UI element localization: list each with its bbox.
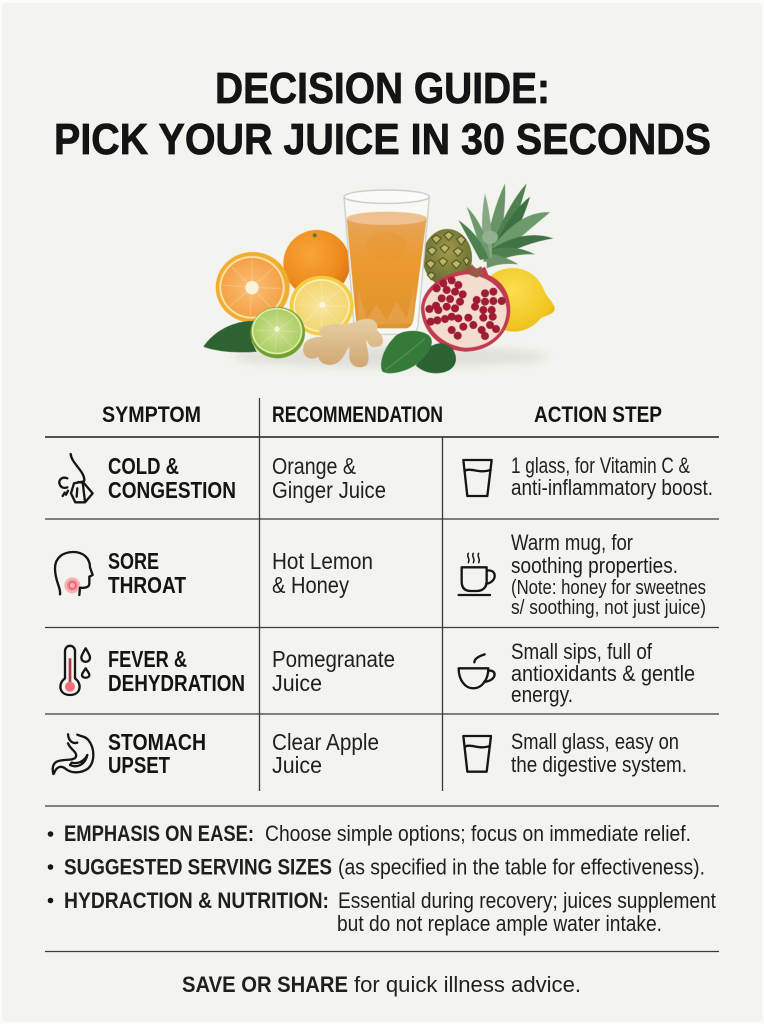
table header: ACTION STEP [534, 402, 662, 427]
icon: head with sore throat [55, 552, 93, 595]
recommendation: orange and ginger: Ginger Juice [272, 477, 386, 503]
icon: glass [463, 460, 492, 496]
halved orange [216, 252, 290, 323]
pomegranate seeds [425, 276, 506, 340]
pineapple body [423, 229, 472, 286]
symptom: cold and congestion: CONGESTION [108, 477, 236, 503]
recommendation: clear apple juice [272, 729, 379, 778]
spinach leaves [381, 331, 456, 373]
action: small sips: Small sips, full of [511, 639, 653, 664]
symptom: stomach upset: STOMACH [108, 729, 206, 755]
green leaf [203, 321, 257, 352]
footer call to action [182, 972, 581, 997]
pineapple crown [458, 183, 553, 268]
recommendation: clear apple juice: Clear Apple [272, 729, 379, 755]
action: small glass: the digestive system. [511, 752, 687, 777]
recommendation: orange and ginger [272, 453, 386, 503]
action: small sips: antioxidants & gentle [511, 661, 695, 686]
action: one glass: 1 glass, for Vitamin C & [511, 453, 690, 478]
symptom: fever and dehydration: DEHYDRATION [108, 670, 245, 696]
notes section [45, 806, 719, 952]
recommendation: hot lemon and honey [272, 548, 373, 598]
recommendation: orange and ginger: Orange & [272, 453, 356, 479]
recommendation: pomegranate juice: Pomegranate [272, 646, 395, 672]
recommendation: hot lemon and honey: Hot Lemon [272, 548, 373, 574]
pomegranate [421, 264, 510, 352]
action: one glass: anti-inflammatory boost. [511, 475, 713, 500]
icon: cup with steam [459, 654, 495, 688]
title: DECISION GUIDE: [215, 64, 550, 113]
lime [250, 307, 305, 358]
action: warm mug with note: s/ soothing, not just juice) [511, 597, 706, 619]
icon: nose with tissue [59, 454, 93, 502]
footer call to action: SAVE OR SHARE [182, 972, 348, 997]
icon: small glass [463, 736, 491, 772]
symptom: stomach upset [108, 729, 206, 778]
bullet: emphasis on ease: Choose simple options; focus on immediate relief. [265, 821, 691, 846]
footer call to action: for quick illness advice. [354, 972, 581, 997]
action: one glass [511, 453, 713, 500]
hero image: juice glass with fruits [203, 183, 555, 373]
bullet: suggested serving sizes [48, 854, 705, 880]
action: small glass [511, 729, 687, 777]
action: warm mug with note [511, 530, 706, 619]
action: warm mug with note: soothing properties. [511, 553, 678, 578]
recommendation: pomegranate juice [272, 646, 395, 696]
bullet: hydration and nutrition [48, 888, 717, 936]
bullet: suggested serving sizes: SUGGESTED SERVING SIZES [64, 854, 332, 880]
bullet: emphasis on ease: EMPHASIS ON EASE: [64, 821, 254, 846]
bullet: suggested serving sizes: (as specified in the table for effectiveness). [338, 854, 705, 880]
bullet: hydration and nutrition: HYDRACTION & NUTRITION: [64, 888, 329, 913]
action: small glass: Small glass, easy on [511, 729, 679, 754]
symptom: cold and congestion [108, 453, 236, 503]
symptom: cold and congestion: COLD & [108, 453, 179, 479]
action: warm mug with note: Warm mug, for [511, 530, 633, 555]
table header: SYMPTOM [102, 402, 201, 427]
action: warm mug with note: (Note: honey for sweetnes [511, 577, 706, 599]
table grid lines [45, 398, 719, 791]
symptom: fever and dehydration: FEVER & [108, 646, 187, 672]
action: small sips [511, 639, 695, 707]
title [54, 64, 711, 164]
symptom: sore throat: SORE [108, 548, 159, 574]
whole orange [283, 230, 350, 297]
whole lemon [486, 268, 555, 332]
table header: RECOMMENDATION [272, 402, 443, 427]
action: small sips: energy. [511, 682, 573, 707]
table header [102, 402, 662, 427]
bullet: emphasis on ease [48, 821, 691, 846]
symptom: sore throat: THROAT [108, 572, 186, 598]
symptom: sore throat [108, 548, 186, 598]
table [45, 398, 719, 791]
icon: steaming mug [459, 553, 495, 595]
ginger root [303, 319, 383, 367]
bullet: hydration and nutrition: but do not replace ample water intake. [337, 911, 662, 936]
symptom: fever and dehydration [108, 646, 245, 696]
icon: thermometer and water drops [60, 646, 90, 695]
recommendation: pomegranate juice: Juice [272, 670, 322, 696]
symptom: stomach upset: UPSET [108, 752, 170, 778]
recommendation: hot lemon and honey: & Honey [272, 572, 349, 598]
juice glass [344, 190, 429, 334]
recommendation: clear apple juice: Juice [272, 752, 322, 778]
halved lemon [290, 276, 354, 336]
icon: stomach [53, 734, 93, 774]
